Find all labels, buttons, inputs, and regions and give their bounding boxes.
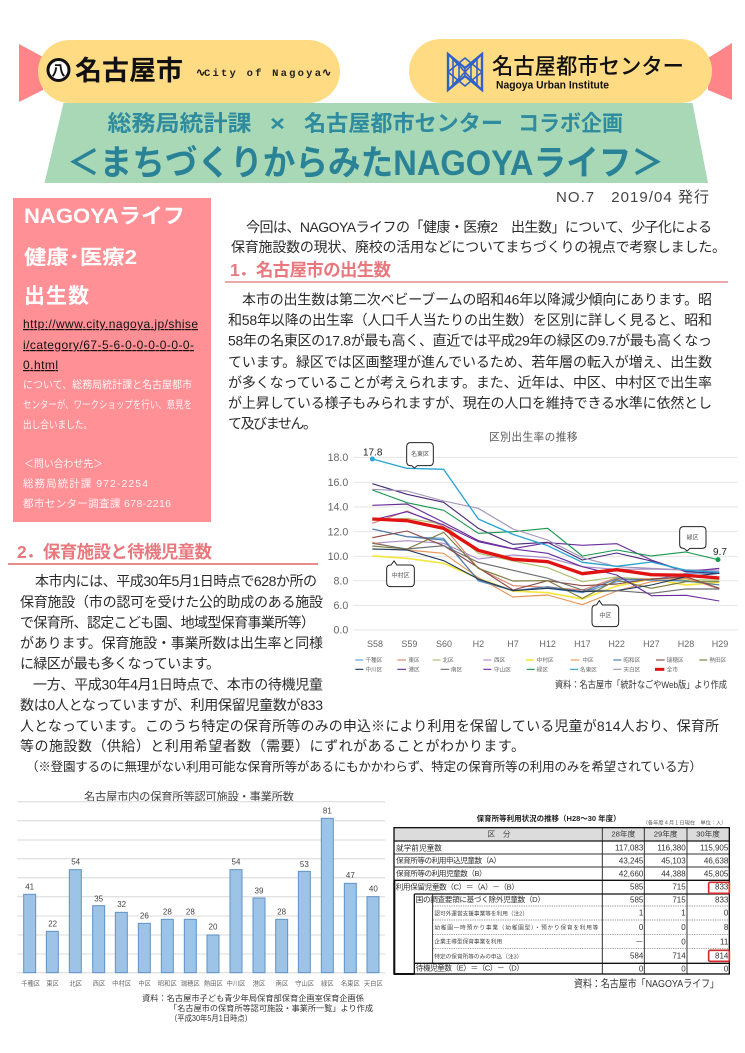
table: childcare usage status	[394, 813, 729, 974]
footnote: （※登園するのに無理がない利用可能な保育所等があるにもかかわらず、特定の保育所等の利用のみを希望されている方）	[26, 759, 702, 774]
header left: City of Nagoya logo ribbon	[19, 40, 340, 103]
sidebar panel: NAGOYA life: 健康･医療2	[24, 246, 137, 269]
y axis labels: 10.0	[328, 551, 348, 563]
sidebar panel: NAGOYA life: 総務局統計課 972-2254	[23, 477, 148, 490]
bar value labels: 39	[255, 886, 264, 895]
ward labels: 天白区	[364, 979, 383, 988]
table numbers: －	[635, 937, 643, 946]
x axis labels: H2	[473, 639, 484, 649]
y axis labels	[328, 452, 348, 637]
section heading 2: 2．保育施設と待機児童数	[17, 542, 212, 562]
callout: Meito	[407, 443, 433, 468]
title banner	[44, 103, 708, 183]
table numbers	[615, 844, 729, 973]
section 1 body text	[228, 292, 712, 432]
bar chart source: （平成30年5月1日時点）	[170, 1013, 252, 1023]
table row labels: 認可外運営支援事業等を利用（注2）	[434, 909, 528, 917]
legend: 名東区	[580, 665, 597, 673]
bar value labels: 20	[209, 923, 218, 932]
legend: 中川区	[365, 665, 383, 673]
table row labels: 待機児童数（E）＝（C）－（D）	[416, 962, 524, 972]
bar chart: licensed childcare facilities by ward	[17, 790, 385, 988]
sidebar panel: NAGOYA life: 0.html	[23, 358, 58, 372]
y axis labels: 16.0	[328, 477, 348, 489]
table numbers: 116,380	[657, 844, 686, 853]
section 2 body text	[20, 573, 719, 754]
table header row: 30年度	[696, 829, 720, 839]
subtitle: collaboration line: 総務局統計課	[108, 111, 252, 136]
table numbers: 0	[724, 964, 729, 973]
ward labels: 熱田区	[204, 979, 223, 988]
section 1 body text: が多くなっていることが考えられます。また、近年は、中区、中村区で出生率	[228, 374, 712, 390]
chart title: 区別出生率の推移	[489, 431, 578, 444]
legend	[355, 656, 727, 673]
ward labels: 東区	[46, 979, 60, 988]
ward labels: 中村区	[112, 979, 132, 988]
sidebar panel: NAGOYA life: について、総務局統計課と名古屋都市	[23, 378, 192, 391]
table numbers: 585	[630, 883, 644, 892]
legend: 熱田区	[709, 656, 727, 664]
x axis labels: H27	[643, 639, 660, 649]
ward labels: 緑区	[321, 979, 334, 988]
table numbers: 814	[715, 952, 729, 961]
ward labels: 守山区	[295, 980, 315, 988]
section 2 body text: 一方、平成30年4月1日時点で、本市の待機児童	[33, 676, 323, 692]
sidebar panel: NAGOYA life: 出生数	[24, 285, 89, 308]
table numbers: 715	[672, 883, 686, 892]
bar value labels: 28	[163, 908, 172, 917]
table row labels: 幼稚園一時預かり事業（幼稚園型）・預かり保育を利用等	[434, 923, 599, 931]
section 1 body text: ています。緑区では区画整理が進んでいるため、若年層の転入が増え、出生数	[228, 354, 712, 370]
ward labels: 中川区	[227, 979, 246, 988]
table row labels: 就学前児童数	[396, 842, 442, 852]
table unit note: （各年度４月１日現在 単位：人）	[643, 819, 727, 826]
table numbers: 833	[715, 896, 729, 905]
line chart: birth rate by ward	[328, 431, 738, 673]
legend: 緑区	[537, 665, 548, 673]
table header row: 29年度	[654, 829, 678, 839]
table row labels: 企業主導型保育事業を利用	[434, 938, 503, 946]
table numbers: 45,103	[661, 856, 686, 865]
section 2 body text: があります。保育施設・事業所数は出生率と同様	[20, 635, 323, 651]
legend: 全市	[667, 665, 678, 673]
table numbers: 46,638	[704, 856, 729, 865]
section 1 body text: が上昇している様子もみられますが、現在の人口を維持できる水準に依然とし	[228, 395, 712, 411]
bar value labels: 26	[140, 911, 149, 920]
header left: City of Nagoya logo ribbon: City of Nagoya	[204, 68, 322, 80]
bar value labels: 28	[186, 908, 195, 917]
subtitle: collaboration line: 名古屋都市センター	[304, 111, 503, 136]
bars	[24, 818, 379, 973]
callout: Nakamura	[387, 561, 414, 587]
x axis labels: S58	[367, 639, 383, 649]
header left: City of Nagoya logo ribbon: ∿	[196, 67, 205, 79]
bar chart source: 資料：名古屋市子ども青少年局保育部保育企画室保育企画係	[142, 993, 364, 1003]
y axis labels: 18.0	[328, 452, 348, 464]
x axis labels: H12	[539, 639, 556, 649]
bar value labels: 54	[232, 858, 241, 867]
table numbers: 11	[720, 937, 729, 946]
callout: Meito: 名東区	[411, 450, 429, 458]
bar value labels	[25, 806, 378, 932]
table numbers: 115,905	[700, 844, 729, 853]
subtitle: collaboration line: コラボ企画	[518, 111, 623, 136]
section 2 body text: 人となっています。このうち特定の保育所等のみの申込※により利用を保留している児童が814人おり、保育所	[20, 718, 719, 734]
x axis labels: H22	[608, 639, 625, 649]
bar value labels: 47	[346, 871, 355, 880]
table row labels: 特定の保育所等のみの申込（注3）	[434, 952, 522, 960]
y axis labels: 6.0	[334, 600, 348, 612]
ward labels: 中区	[138, 979, 152, 988]
subtitle: collaboration line	[108, 111, 623, 136]
main title: ＜まちづくりからみたNAGOYAライフ＞	[67, 144, 664, 183]
callout: Midori	[680, 527, 706, 551]
table numbers: 0	[681, 937, 686, 946]
table numbers: 833	[715, 883, 729, 892]
highlight boxes: 833 and 814	[709, 882, 729, 961]
ward labels: 昭和区	[158, 979, 177, 988]
table header row: 28年度	[611, 829, 636, 839]
subtitle: collaboration line: ×	[270, 111, 285, 136]
legend: 天白区	[623, 665, 641, 673]
ward series lines	[372, 459, 719, 605]
section 2 body text: に緑区が最も多くなっています。	[20, 656, 220, 672]
table numbers: 0	[681, 964, 686, 973]
table row labels: 国の調査要領に基づく除外児童数（D）	[416, 894, 545, 904]
header left: City of Nagoya logo ribbon: 八	[52, 62, 66, 78]
table numbers: 715	[672, 896, 686, 905]
ward labels	[21, 979, 383, 988]
header right: Nagoya Urban Institute logo ribbon	[409, 39, 732, 103]
y axis labels: 8.0	[334, 575, 348, 587]
x axis labels: H29	[712, 639, 728, 649]
sidebar panel: NAGOYA life: 出し合いました。	[23, 418, 92, 431]
bar value labels: 40	[369, 884, 378, 893]
sidebar panel: NAGOYA life: ＜問い合わせ先＞	[24, 457, 103, 470]
ward labels: 港区	[253, 979, 266, 988]
header left: City of Nagoya logo ribbon: 名古屋市	[75, 56, 183, 86]
legend: 千種区	[365, 656, 383, 664]
x axis labels: H7	[507, 639, 519, 649]
table numbers: 585	[630, 896, 644, 905]
callout: Nakamura: 中村区	[392, 572, 410, 580]
legend: 瑞穂区	[667, 656, 684, 664]
bar value labels: 28	[277, 908, 287, 917]
table numbers: 0	[639, 964, 644, 973]
section 1 body text: 58年の名東区の17.8が最も高く、直近では平成29年の緑区の9.7が最も高くなっ	[228, 332, 712, 348]
section 2 body text: で保育所、認定こども園、地域型保育事業所等）	[20, 614, 315, 630]
section 1 body text: 本市の出生数は第二次ベビーブームの昭和46年以降減少傾向にあります。昭	[242, 292, 712, 308]
bar chart source	[142, 993, 373, 1023]
table numbers: 45,805	[704, 869, 729, 878]
x axis labels: S60	[436, 639, 452, 649]
x axis labels: H17	[574, 639, 591, 649]
table source: 資料：名古屋市「NAGOYAライフ」	[574, 977, 719, 990]
table row labels: 保育所等の利用児童数（B）	[396, 868, 487, 878]
callout: Naka: 中区	[599, 612, 611, 620]
section 2 body text: 本市内には、平成30年5月1日時点で628か所の	[35, 573, 317, 589]
y axis labels: 0.0	[334, 625, 348, 637]
y axis labels: 14.0	[328, 502, 348, 514]
bar value labels: 41	[25, 883, 35, 892]
table header row: 区 分	[488, 830, 511, 839]
bar value labels: 35	[94, 894, 104, 903]
y axis labels: 12.0	[328, 526, 348, 538]
table numbers: 714	[672, 952, 686, 961]
section 1 body text: 和58年以降の出生率（人口千人当たりの出生数）を区別に詳しく見ると、昭和	[228, 312, 712, 328]
ward labels: 千種区	[21, 979, 41, 988]
ward labels: 西区	[93, 980, 106, 988]
section 2 body text: 等の施設数（供給）と利用希望者数（需要）にずれがあることがわかります。	[20, 738, 525, 754]
bar value labels: 54	[71, 858, 81, 867]
legend: 中区	[582, 656, 594, 664]
legend: 守山区	[494, 665, 511, 673]
table numbers: 0	[724, 909, 729, 918]
sidebar panel: NAGOYA life: 都市センター調査課 678-2216	[23, 497, 171, 510]
callout: Midori: 緑区	[687, 533, 699, 541]
bar value labels: 32	[117, 900, 127, 909]
x axis labels	[367, 639, 728, 649]
header right: Nagoya Urban Institute logo ribbon: 名古屋都市センター	[492, 54, 684, 79]
legend: 昭和区	[623, 656, 641, 664]
table row labels	[396, 842, 599, 972]
x axis labels: H28	[678, 639, 694, 649]
table numbers: 1	[681, 909, 686, 918]
table header row	[394, 828, 729, 841]
ward labels: 南区	[276, 979, 289, 988]
peak marker 17.8: 17.8	[363, 447, 383, 458]
bar value labels: 53	[300, 860, 309, 869]
table numbers: 42,660	[619, 869, 644, 878]
icon: institute mark	[448, 54, 482, 90]
legend: 東区	[408, 656, 420, 664]
issue number and date: NO.7 2019/04 発行	[556, 189, 709, 206]
header right: Nagoya Urban Institute logo ribbon: Nagoya Urban Institute	[496, 80, 609, 92]
callout: Naka	[592, 601, 619, 627]
table title: 保育所等利用状況の推移（H28～30 年度）	[477, 813, 621, 823]
marker 9.7: 9.7	[713, 547, 727, 558]
ward labels: 名東区	[341, 979, 360, 988]
legend: 西区	[494, 657, 506, 664]
table numbers: 43,245	[619, 856, 644, 865]
sidebar panel: NAGOYA life: i/category/67-5-6-0-0-0-0-0-0-	[23, 338, 194, 352]
intro text: 今回は、NAGOYAライフの「健康・医療2 出生数」について、少子化による	[246, 219, 712, 235]
section 1 body text: て及びません。	[228, 416, 317, 432]
table numbers: 8	[724, 923, 729, 932]
ward labels: 北区	[69, 980, 83, 988]
section 2 body text: 数は0人となっていますが、利用保留児童数が833	[20, 697, 323, 713]
bar value labels: 22	[48, 919, 58, 928]
table row labels: 利用保留児童数（C）＝（A）－（B）	[396, 882, 519, 892]
legend: 中村区	[537, 656, 554, 664]
sidebar panel: NAGOYA life: NAGOYAライフ	[24, 205, 185, 228]
bar chart source: 「名古屋市の保育所等認可施設・事業所一覧」より作成	[169, 1003, 373, 1013]
table numbers: 0	[681, 923, 686, 932]
sidebar panel: NAGOYA life: http://www.city.nagoya.jp/shise	[23, 317, 198, 331]
ward labels: 瑞穂区	[181, 979, 200, 988]
table numbers: 1	[639, 909, 644, 918]
x axis labels: S59	[401, 639, 417, 649]
header left: City of Nagoya logo ribbon: ∿	[322, 67, 331, 79]
table numbers: 584	[630, 952, 644, 961]
table row labels: 保育所等の利用申込児童数（A）	[396, 855, 501, 865]
legend: 北区	[442, 656, 454, 664]
section heading 1: 1．名古屋市の出生数	[230, 260, 392, 280]
intro text	[231, 219, 726, 255]
table numbers: 117,083	[615, 844, 644, 853]
legend: 南区	[451, 665, 463, 673]
bar value labels: 81	[323, 806, 332, 815]
bar chart title: 名古屋市内の保育所等認可施設・事業所数	[84, 790, 294, 804]
section 2 body text: 保育施設（市の認可を受けた公的助成のある施設	[20, 594, 323, 610]
table numbers: 0	[639, 923, 644, 932]
intro text: 保育施設数の現状、廃校の活用などについてまちづくりの視点で考察しました。	[231, 239, 726, 255]
sidebar panel: NAGOYA life	[13, 198, 211, 522]
table numbers: 44,388	[661, 869, 686, 878]
sidebar panel: NAGOYA life: センターが、ワークショップを行い、意見を	[23, 398, 192, 411]
citywide line	[372, 519, 719, 578]
legend: 港区	[408, 665, 420, 673]
